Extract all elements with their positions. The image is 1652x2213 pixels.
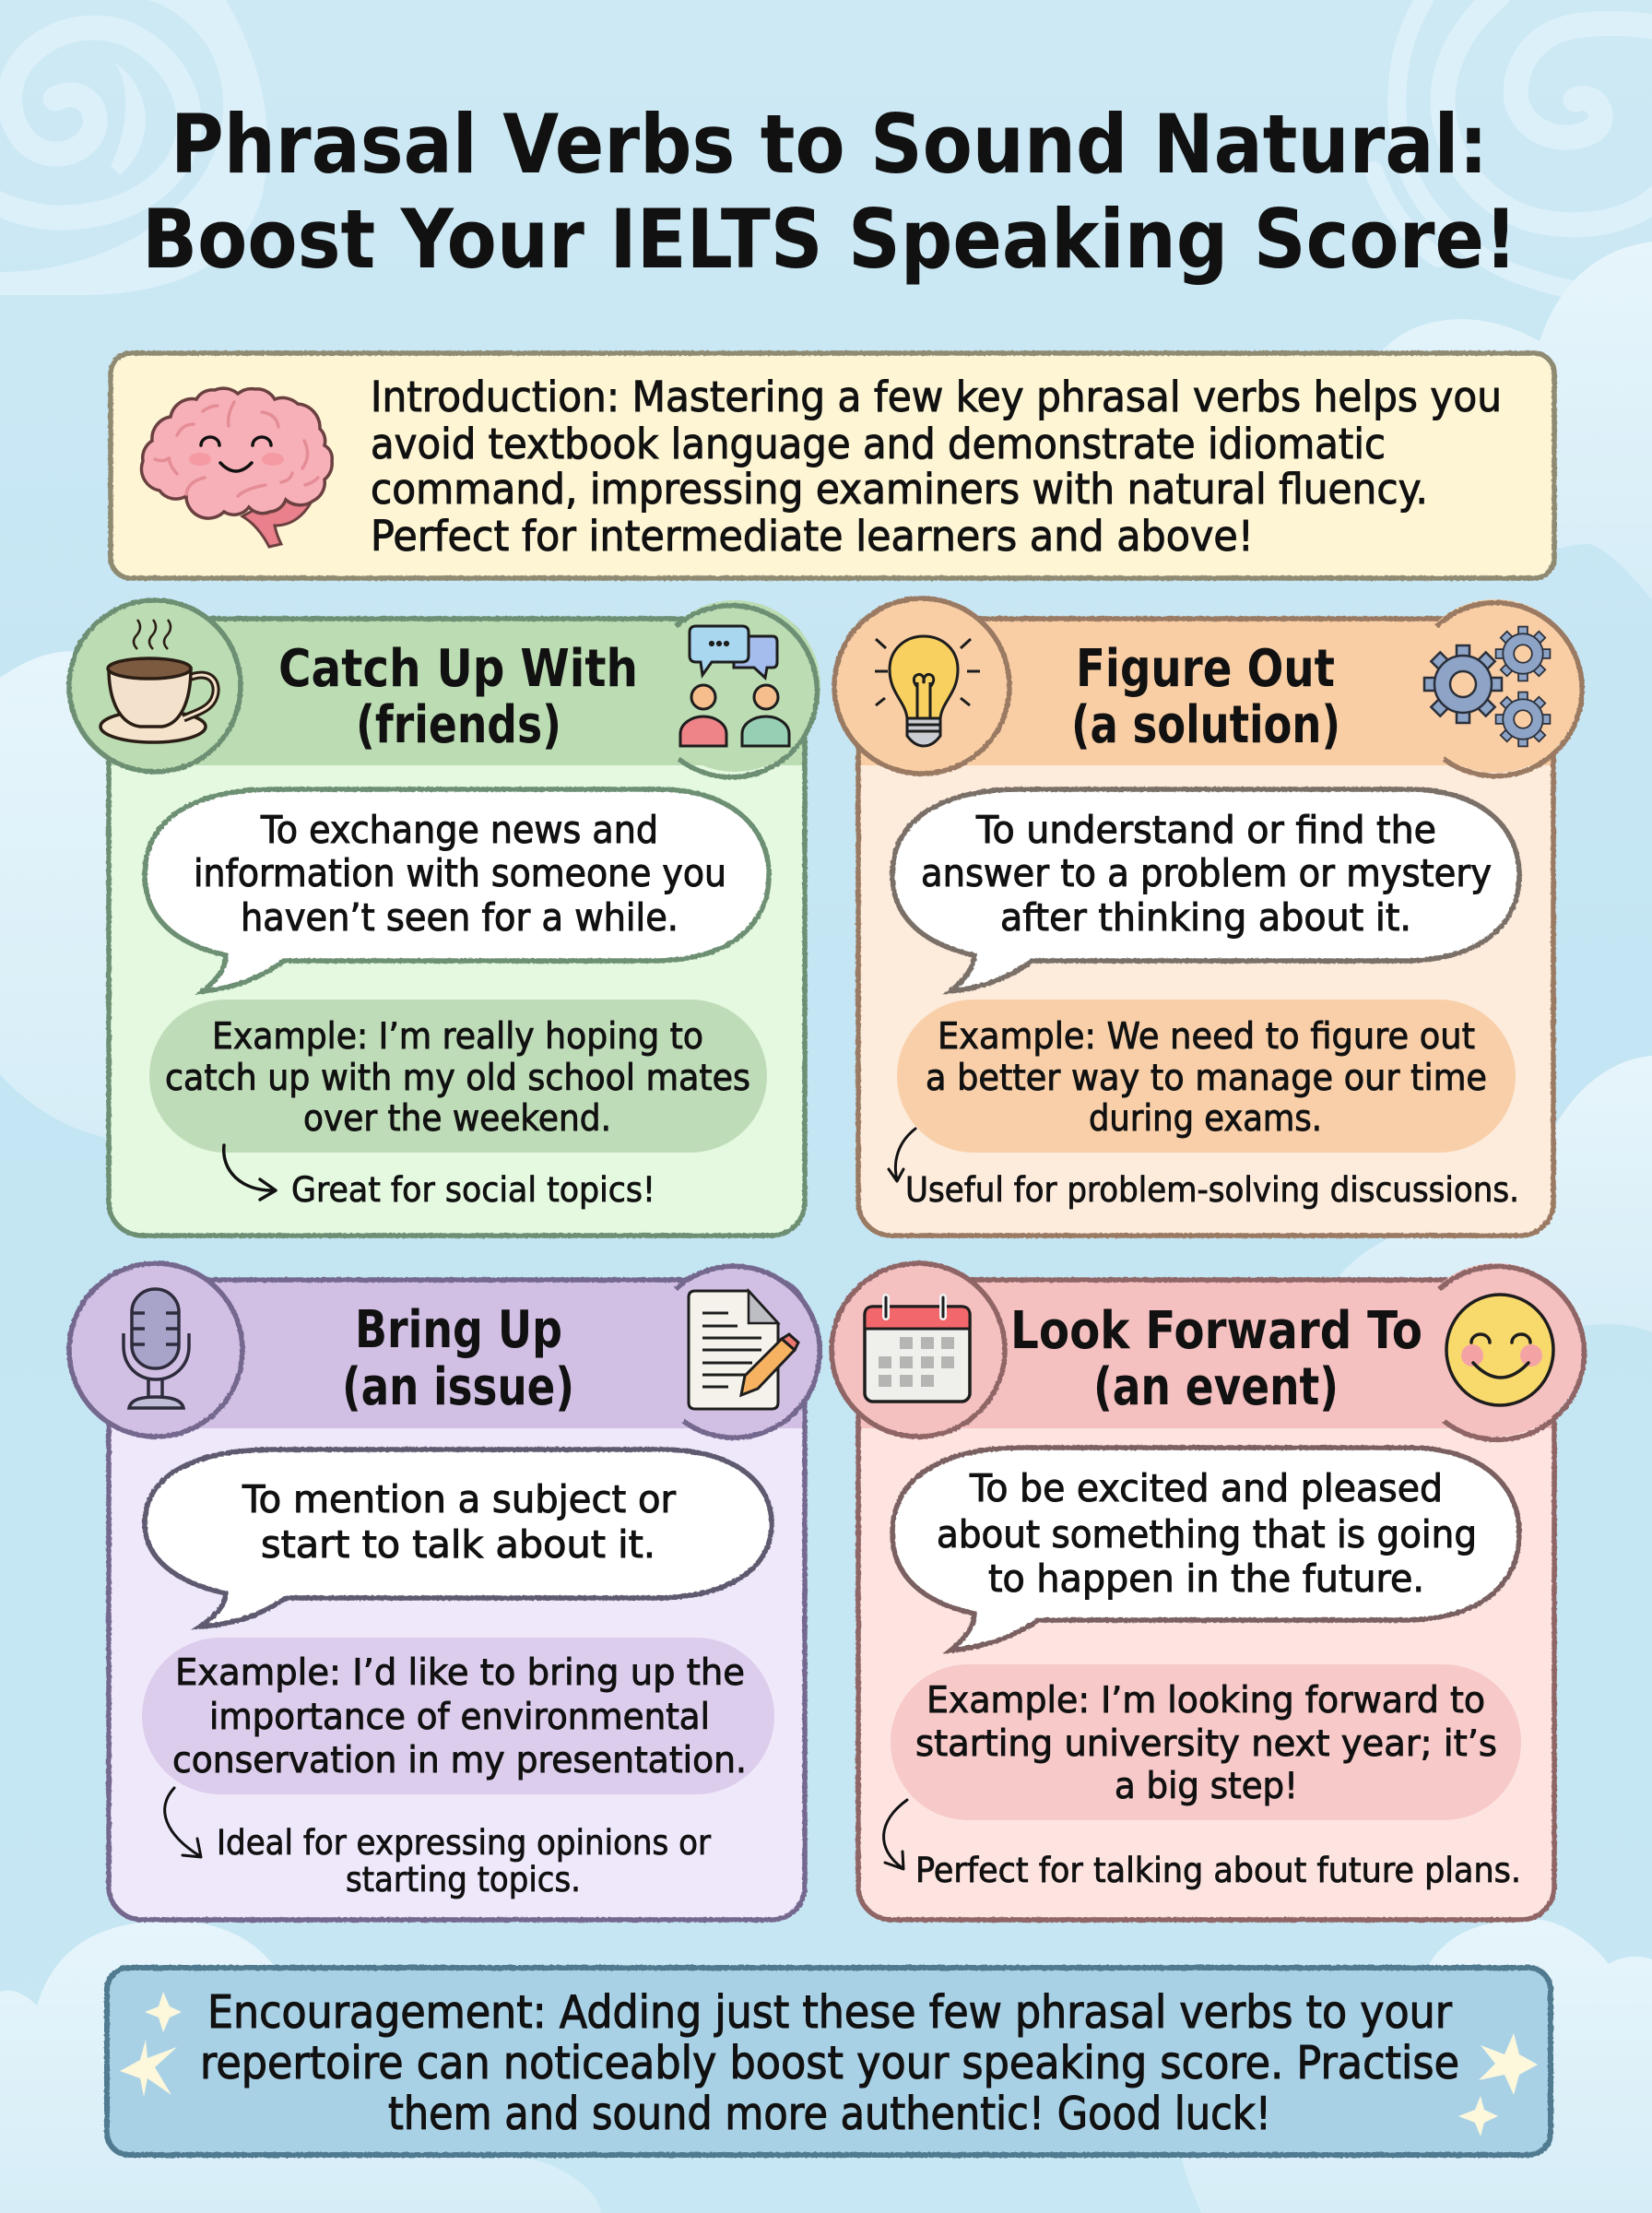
encouragement text: Encouragement: Adding just these few phrasal verbs to your (207, 1986, 1453, 2039)
encouragement text: repertoire can noticeably boost your speaking score. Practise (200, 2037, 1459, 2089)
definition speech bubble (892, 789, 1519, 991)
panel: encouragement (107, 1968, 1551, 2155)
definition speech bubble (145, 789, 769, 991)
intro text: Introduction: Mastering a few key phrasal verbs helps you (371, 373, 1502, 421)
example pill (149, 1000, 767, 1153)
panel: Look Forward To (832, 1263, 1584, 1920)
definition speech bubble (145, 1450, 772, 1627)
intro text: avoid textbook language and demonstrate idiomatic (371, 420, 1386, 468)
icon: gears (1424, 627, 1550, 746)
usage note: Useful for problem-solving discussions. (905, 1170, 1519, 1210)
card title: Catch Up With (278, 639, 638, 699)
example pill (142, 1638, 774, 1794)
example pill: a better way to manage our time (926, 1058, 1487, 1099)
icon: friends chatting (680, 626, 789, 746)
example pill: conservation in my presentation. (172, 1740, 747, 1781)
example pill: Example: I’m really hoping to (212, 1016, 703, 1058)
title: Boost Your IELTS Speaking Score! (142, 192, 1517, 287)
card title: Look Forward To (1010, 1301, 1422, 1361)
example pill: Example: I’d like to bring up the (175, 1652, 745, 1694)
example pill: during exams. (1089, 1098, 1322, 1140)
example pill: Example: We need to figure out (938, 1016, 1475, 1058)
icon: document and pencil (689, 1291, 798, 1409)
usage note: Perfect for talking about future plans. (915, 1851, 1521, 1890)
icon: smiling brain (141, 388, 332, 547)
definition speech bubble (892, 1448, 1519, 1651)
example pill: importance of environmental (209, 1697, 710, 1738)
stars (120, 1992, 1538, 2136)
example pill: starting university next year; it’s (915, 1723, 1497, 1765)
definition speech bubble: haven’t seen for a while. (241, 895, 678, 940)
example pill: Example: I’m looking forward to (926, 1680, 1485, 1722)
card title (1010, 1301, 1422, 1417)
title: Phrasal Verbs to Sound Natural: (171, 97, 1488, 192)
card title: (an issue) (342, 1357, 574, 1417)
arrow (165, 1788, 201, 1857)
icon: smiley (1446, 1295, 1553, 1405)
definition speech bubble: answer to a problem or mystery (921, 851, 1492, 895)
card title: Bring Up (355, 1300, 562, 1360)
usage note: Ideal for expressing opinions or (217, 1823, 712, 1863)
example pill: catch up with my old school mates (165, 1058, 750, 1099)
intro text: command, impressing examiners with natural fluency. (371, 465, 1428, 514)
definition speech bubble: to happen in the future. (988, 1556, 1424, 1601)
card title: (a solution) (1071, 695, 1340, 755)
usage note: starting topics. (346, 1860, 581, 1899)
definition speech bubble: start to talk about it. (261, 1522, 655, 1567)
arrow (224, 1145, 276, 1200)
example pill (891, 1664, 1521, 1820)
example pill: a big step! (1115, 1766, 1298, 1807)
definition speech bubble: after thinking about it. (1000, 895, 1411, 940)
encouragement text: them and sound more authentic! Good luck! (388, 2088, 1271, 2140)
encouragement text (200, 1986, 1459, 2140)
definition speech bubble: To exchange news and (260, 808, 658, 852)
panel: Bring Up (69, 1263, 820, 1920)
card title: Figure Out (1076, 639, 1335, 699)
usage note (217, 1823, 712, 1899)
card title (1071, 639, 1340, 755)
panel: introduction (111, 353, 1554, 578)
arrow (884, 1800, 907, 1869)
icon: microphone (124, 1289, 189, 1408)
example pill: over the weekend. (303, 1098, 611, 1140)
panel: Figure Out (834, 598, 1582, 1236)
definition speech bubble: To understand or find the (975, 808, 1436, 852)
intro text: Perfect for intermediate learners and above! (371, 512, 1254, 561)
definition speech bubble: about something that is going (937, 1512, 1477, 1556)
card title (278, 639, 638, 755)
card title: (friends) (356, 695, 561, 755)
panel: Catch Up With (69, 600, 820, 1236)
card title: (an event) (1093, 1357, 1339, 1417)
arrow (889, 1129, 915, 1181)
icon: coffee cup (100, 620, 216, 742)
example pill (897, 1000, 1516, 1153)
title (142, 97, 1517, 287)
card title (342, 1300, 574, 1417)
usage note: Great for social topics! (291, 1170, 655, 1210)
icon: light bulb (875, 636, 980, 746)
icon: calendar (865, 1297, 970, 1402)
definition speech bubble: To mention a subject or (242, 1477, 676, 1521)
definition speech bubble: information with someone you (194, 851, 726, 895)
intro text (371, 373, 1502, 561)
definition speech bubble: To be excited and pleased (969, 1466, 1443, 1510)
